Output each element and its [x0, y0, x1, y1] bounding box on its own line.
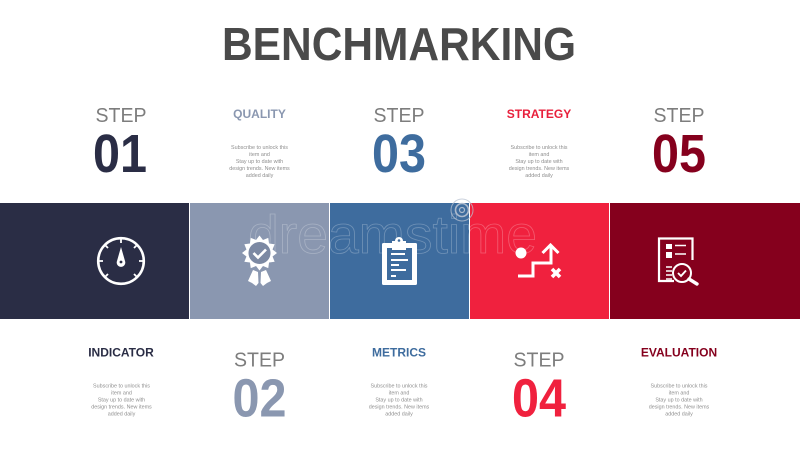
step 03 heading	[372, 105, 426, 184]
quality text block: item and	[249, 152, 270, 158]
watermark: dreamstime	[248, 205, 537, 265]
strategy text block	[507, 107, 571, 179]
evaluation text block	[641, 346, 717, 418]
indicator text block: design trends. New items	[91, 404, 152, 410]
icon: award ribbon	[242, 236, 277, 286]
metrics text block: design trends. New items	[369, 404, 430, 410]
indicator text block: INDICATOR	[88, 346, 154, 360]
quality text block: Subscribe to unlock this	[231, 145, 288, 151]
metrics text block: METRICS	[372, 346, 426, 360]
indicator text block: added daily	[108, 412, 136, 418]
step 02 heading: 02	[232, 368, 286, 428]
quality text block: added daily	[246, 173, 274, 179]
strategy text block: STRATEGY	[507, 107, 571, 121]
step 01 heading: 01	[93, 124, 147, 184]
step 04 heading: STEP	[514, 350, 564, 372]
evaluation text block: added daily	[665, 412, 693, 418]
icon: strategy steps	[516, 245, 560, 277]
strategy text block: item and	[529, 152, 549, 158]
panel: strategy	[470, 203, 609, 319]
quality text block: Stay up to date with	[236, 159, 283, 165]
metrics text block: Subscribe to unlock this	[371, 384, 428, 390]
evaluation text block: item and	[669, 390, 689, 396]
metrics text block: item and	[389, 390, 409, 396]
strategy text block: added daily	[525, 173, 553, 179]
quality text block: design trends. New items	[229, 166, 290, 172]
metrics text block: added daily	[385, 412, 413, 418]
evaluation text block: design trends. New items	[649, 404, 710, 410]
quality text block: QUALITY	[233, 107, 286, 121]
indicator text block: Stay up to date with	[98, 398, 145, 404]
step 05 heading	[652, 105, 706, 184]
panel: evaluation	[610, 203, 800, 319]
indicator text block	[88, 346, 154, 418]
step 02 heading	[232, 350, 286, 428]
indicator text block: item and	[111, 390, 132, 396]
step 05 heading: STEP	[654, 105, 704, 127]
evaluation text block: EVALUATION	[641, 346, 717, 360]
step 03 heading: 03	[372, 124, 426, 184]
step 04 heading: 04	[512, 368, 566, 428]
metrics text block	[369, 346, 430, 418]
panel: indicator	[0, 203, 189, 319]
title: BENCHMARKING	[222, 18, 576, 70]
strategy text block: Subscribe to unlock this	[511, 145, 568, 151]
evaluation text block: Subscribe to unlock this	[651, 384, 708, 390]
strategy text block: design trends. New items	[509, 166, 570, 172]
quality text block	[229, 107, 290, 179]
step 05 heading: 05	[652, 124, 706, 184]
panel: quality	[190, 203, 329, 319]
step 01 heading	[93, 105, 147, 184]
icon: gauge	[98, 238, 144, 284]
step 01 heading: STEP	[96, 105, 146, 127]
icon: clipboard	[382, 237, 417, 285]
strategy text block: Stay up to date with	[515, 159, 563, 165]
step 04 heading	[512, 350, 566, 428]
metrics text block: Stay up to date with	[375, 398, 423, 404]
step 02 heading: STEP	[234, 350, 285, 372]
indicator text block: Subscribe to unlock this	[93, 384, 150, 390]
evaluation text block: Stay up to date with	[655, 398, 703, 404]
icon: evaluation report	[659, 238, 697, 284]
panel: metrics	[330, 203, 469, 319]
step 03 heading: STEP	[374, 105, 424, 127]
